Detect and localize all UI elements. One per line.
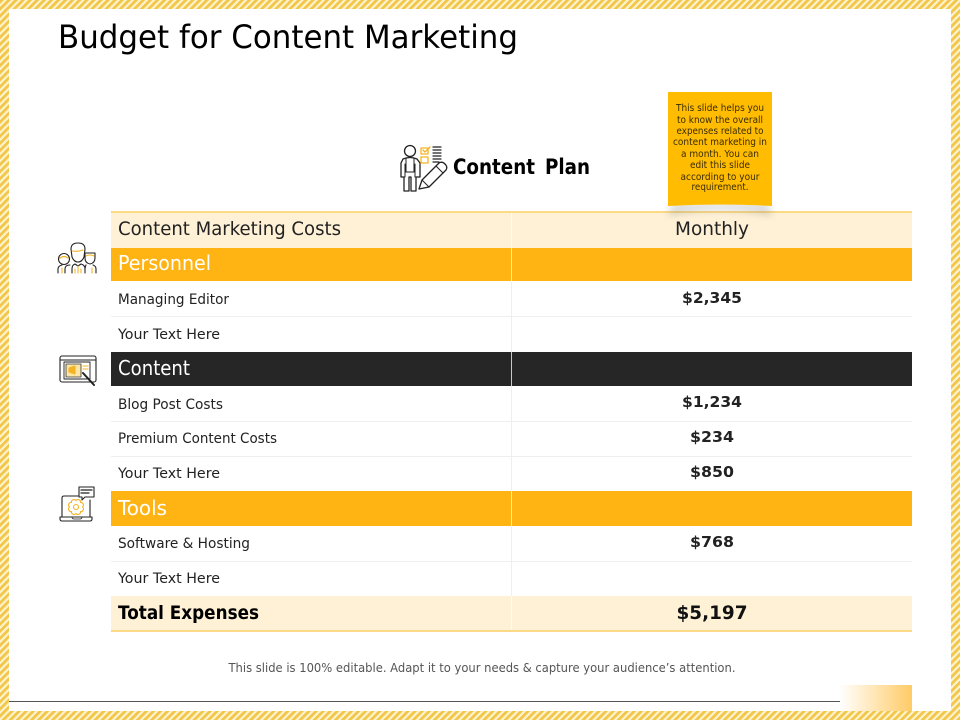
row: Managing Editor: Managing Editor: [118, 292, 229, 308]
heading: Content Plan: [453, 155, 590, 179]
row: Premium Content Costs: [118, 428, 734, 447]
row: Software & Hosting: [118, 533, 734, 552]
section row: Personnel: [111, 248, 912, 281]
section row: Content: [111, 352, 912, 386]
row: Your Text Here 2: [117, 463, 734, 482]
title: Budget for Content Marketing: [58, 18, 518, 56]
heading: Content Plan: Content: [453, 155, 535, 179]
icon: browser with megaphone and cursor: [60, 356, 96, 385]
row: Software & Hosting: $768: [690, 533, 734, 551]
icon: team of people: [58, 243, 96, 273]
row: Managing Editor: $2,345: [682, 289, 742, 307]
sticky note text: This slide helps you: [675, 103, 764, 114]
sticky note: [668, 92, 772, 216]
row: Software & Hosting: Software & Hosting: [118, 536, 250, 552]
heading: Content Plan: Plan: [545, 155, 590, 179]
sticky note text: [673, 103, 767, 193]
table header row: Monthly: [675, 218, 749, 240]
section row: Tools: Tools: [117, 496, 167, 520]
table header row: [111, 211, 912, 248]
total row: Total Expenses: [118, 602, 259, 624]
row: Your Text Here 1: Your Text Here: [117, 327, 220, 343]
footer gradient tab: [840, 685, 912, 711]
icon: laptop with gear and speech bubble: [60, 487, 94, 521]
sticky note text: to know the overall: [677, 115, 763, 126]
sticky note text: expenses related to: [676, 126, 764, 137]
row: Managing Editor: [118, 289, 742, 308]
sticky note text: edit this slide: [690, 160, 750, 171]
sticky note text: a month. You can: [681, 149, 759, 160]
row: Your Text Here 2: Your Text Here: [117, 466, 220, 482]
row: Blog Post Costs: Blog Post Costs: [118, 397, 223, 413]
icon: person with checklist and pencil: [401, 146, 447, 191]
sticky note text: according to your: [680, 172, 760, 183]
row: Blog Post Costs: $1,234: [682, 393, 742, 411]
total row: $5,197: [676, 602, 748, 624]
row: Your Text Here 3: Your Text Here: [117, 571, 220, 587]
sticky note text: content marketing in: [673, 137, 767, 148]
table header row: Content Marketing Costs: [118, 218, 341, 240]
footer note: This slide is 100% editable. Adapt it to your needs & capture your audience’s attention.: [228, 661, 736, 675]
section row: Tools: [111, 491, 912, 526]
sticky note text: requirement.: [692, 182, 748, 193]
footer rule: [9, 701, 840, 702]
row: Your Text Here 2: $850: [690, 463, 734, 481]
row: Blog Post Costs: [118, 393, 742, 413]
section row: Content: Content: [118, 356, 190, 380]
row: Premium Content Costs: Premium Content Costs: [118, 431, 277, 447]
total row: [111, 596, 912, 632]
row: Premium Content Costs: $234: [690, 428, 734, 446]
table: [111, 211, 912, 632]
section row: Personnel: Personnel: [118, 251, 211, 275]
